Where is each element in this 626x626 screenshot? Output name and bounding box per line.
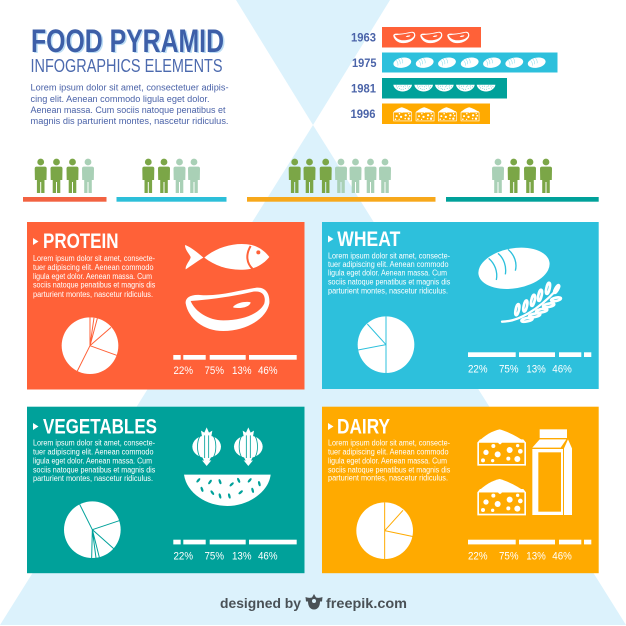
wheat text: tuer adipiscing elit. Aenean commodo <box>328 260 449 269</box>
onion left <box>192 427 221 466</box>
icon: freepik logo <box>306 594 322 610</box>
protein text: parturient montes, nascetur ridiculus. <box>33 290 153 299</box>
intro text: magnis dis parturient montes, nascetur ridiculus. <box>30 116 228 127</box>
dairy pie chart <box>356 502 413 559</box>
1996 row: 1996 <box>350 109 376 121</box>
dairy text: sociis natoque penatibus et magnis dis <box>328 465 450 474</box>
dairy percentages <box>468 550 572 562</box>
footer credit <box>220 594 407 611</box>
1981 row: 1981 <box>351 84 377 96</box>
vegetables text: Lorem ipsum dolor sit amet, consecte- <box>33 439 155 448</box>
icon: onions <box>192 427 263 466</box>
panel: dairy <box>322 407 599 573</box>
icon: cheese top <box>477 429 526 466</box>
wheat text <box>328 251 450 295</box>
wheat percentages <box>468 363 572 375</box>
dairy percentages: 22% <box>468 550 488 562</box>
protein text: ligula eget dolor. Aenean massa. Cum <box>33 272 152 281</box>
dairy text: tuer adipiscing elit. Aenean commodo <box>328 447 449 456</box>
protein percentages: 46% <box>258 365 278 377</box>
people group 2 <box>116 159 226 202</box>
1975 row: 1975 <box>352 58 377 70</box>
icon: watermelon <box>184 475 271 506</box>
wheat percentages: 13% <box>526 363 546 375</box>
protein text: Lorem ipsum dolor sit amet, consecte- <box>33 254 155 263</box>
1981 row <box>351 78 507 98</box>
vegetables text: tuer adipiscing elit. Aenean commodo <box>33 447 154 456</box>
panel: protein <box>27 222 304 390</box>
wheat percentages: 75% <box>499 363 519 375</box>
vegetables percentages: 75% <box>204 550 224 562</box>
icon: milk carton <box>532 429 572 515</box>
wheat text: sociis natoque penatibus et magnis dis <box>328 277 450 286</box>
protein bars <box>173 355 297 360</box>
vegetables text: ligula eget dolor. Aenean massa. Cum <box>33 457 152 466</box>
protein pie chart <box>62 317 118 374</box>
wheat text: Lorem ipsum dolor sit amet, consecte- <box>328 251 450 260</box>
vegetables text <box>33 439 155 483</box>
timeline chart <box>350 27 558 124</box>
wheat percentages: 46% <box>552 363 572 375</box>
1975 row <box>352 52 558 72</box>
title: FOOD PYRAMID <box>31 23 224 59</box>
title: FOOD PYRAMID <box>32 24 226 60</box>
dairy percentages: 46% <box>552 550 572 562</box>
protein text: tuer adipiscing elit. Aenean commodo <box>33 263 154 272</box>
dairy percentages: 75% <box>499 550 519 562</box>
onion right <box>234 427 263 466</box>
icon: bread <box>475 242 553 294</box>
heading: vegetables: VEGETABLES <box>43 415 157 438</box>
1963 row <box>351 27 481 48</box>
footer credit: designed by <box>220 595 301 611</box>
protein percentages <box>174 365 278 377</box>
vegetables bars <box>173 540 297 544</box>
vegetables pie chart <box>64 501 121 558</box>
protein text: sociis natoque penatibus et magnis dis <box>33 281 155 290</box>
wheat percentages: 22% <box>468 363 488 375</box>
heading: wheat: WHEAT <box>337 228 400 251</box>
wheat text: parturient montes, nascetur ridiculus. <box>328 286 448 295</box>
dairy text: ligula eget dolor. Aenean massa. Cum <box>328 456 447 465</box>
intro text: Lorem ipsum dolor sit amet, consectetuer adipis- <box>30 83 228 94</box>
icon: fish <box>185 244 269 270</box>
protein percentages: 22% <box>174 365 193 377</box>
icon: cheese bottom <box>477 479 526 515</box>
intro text: Aenean massa. Cum sociis natoque penatibus et <box>30 105 226 116</box>
vegetables percentages: 46% <box>258 550 278 562</box>
protein percentages: 13% <box>232 365 252 377</box>
dairy percentages: 13% <box>526 550 546 562</box>
intro text: cing elit. Aenean commodo ligula eget dolor. <box>30 94 210 105</box>
wheat text: ligula eget dolor. Aenean massa. Cum <box>328 269 447 278</box>
panel: wheat <box>322 222 599 389</box>
protein percentages: 75% <box>204 365 224 377</box>
vegetables percentages: 13% <box>232 550 252 562</box>
people group 4 <box>446 159 599 202</box>
people group 3 <box>247 159 436 202</box>
heading: protein: PROTEIN <box>43 230 118 253</box>
vegetables percentages <box>174 550 278 562</box>
dairy bars <box>468 540 591 544</box>
people group 1 <box>23 159 106 202</box>
wheat pie chart <box>358 316 414 373</box>
icon: meat <box>186 288 269 331</box>
dairy text <box>328 439 450 483</box>
footer credit: freepik.com <box>326 595 407 611</box>
protein text <box>33 254 155 299</box>
vegetables text: parturient montes, nascetur ridiculus. <box>33 474 153 483</box>
icon: wheat sprig <box>502 282 561 322</box>
vegetables percentages: 22% <box>174 550 193 562</box>
1963 row: 1963 <box>351 32 376 44</box>
1996 row <box>350 104 490 124</box>
intro text <box>30 83 228 127</box>
wheat bars <box>468 352 591 357</box>
dairy text: Lorem ipsum dolor sit amet, consecte- <box>328 439 450 448</box>
heading: dairy: DAIRY <box>337 415 390 438</box>
panel: vegetables <box>27 407 304 573</box>
vegetables text: sociis natoque penatibus et magnis dis <box>33 465 155 474</box>
dairy text: parturient montes, nascetur ridiculus. <box>328 474 448 483</box>
subtitle: INFOGRAPHICS ELEMENTS <box>30 55 222 76</box>
